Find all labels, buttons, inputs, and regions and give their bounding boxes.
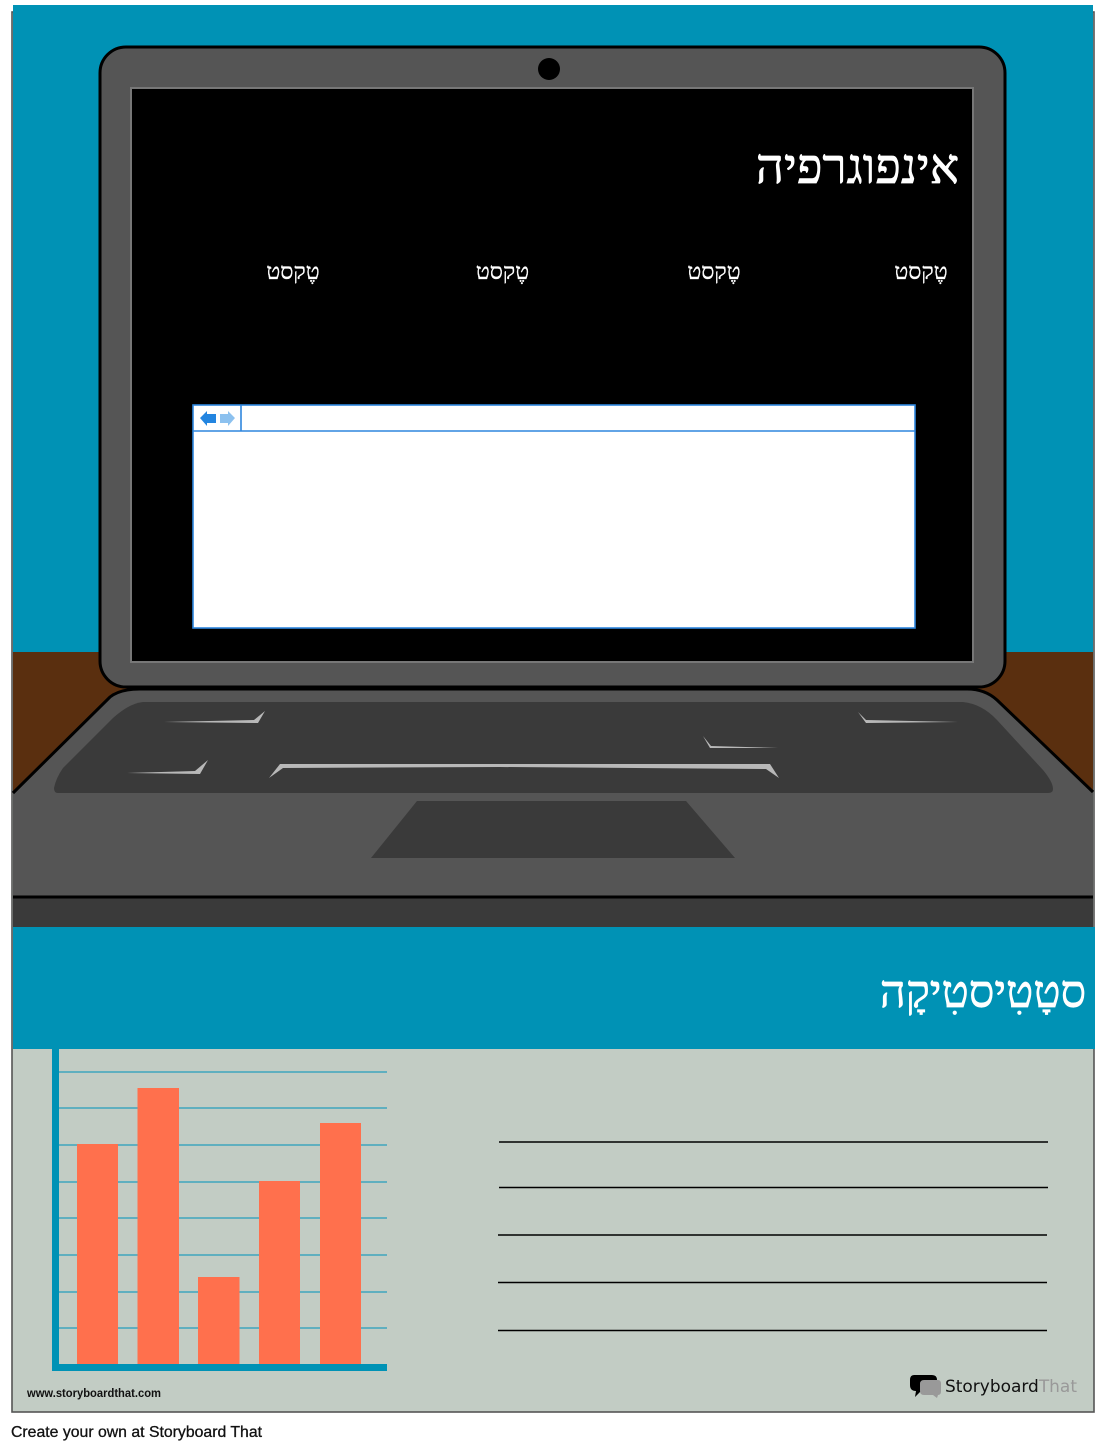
laptop base <box>13 689 1093 928</box>
website text: www.storyboardthat.com <box>26 1386 161 1400</box>
laptop screen <box>131 88 973 662</box>
keyboard area <box>54 702 1053 793</box>
back arrow <box>200 411 216 426</box>
touchpad <box>371 801 735 858</box>
brown desk <box>13 652 1093 797</box>
text label 2: טֶקסט <box>476 259 529 284</box>
storyboard that logo <box>910 1375 1077 1398</box>
text label 1: טֶקסט <box>266 259 320 284</box>
forward arrow <box>220 411 235 426</box>
text label 4: טֶקסט <box>894 259 948 284</box>
text label 3: טֶקסט <box>687 259 741 284</box>
webcam <box>538 58 560 80</box>
statistics header band <box>13 927 1095 1049</box>
statistics panel <box>13 1049 1093 1411</box>
laptop lid <box>100 47 1005 687</box>
teal wall background <box>13 5 1093 653</box>
statistics heading: סטָטִיסטִיקָה <box>880 967 1086 1017</box>
title: אינפוגרפיה <box>756 139 959 194</box>
footer credit: Create your own at Storyboard That <box>11 1424 263 1441</box>
bar chart <box>52 1049 387 1371</box>
browser window <box>193 405 915 628</box>
writing lines <box>498 1142 1048 1330</box>
storyboard that logo: StoryboardThat <box>945 1377 1077 1397</box>
key highlights <box>127 711 958 778</box>
